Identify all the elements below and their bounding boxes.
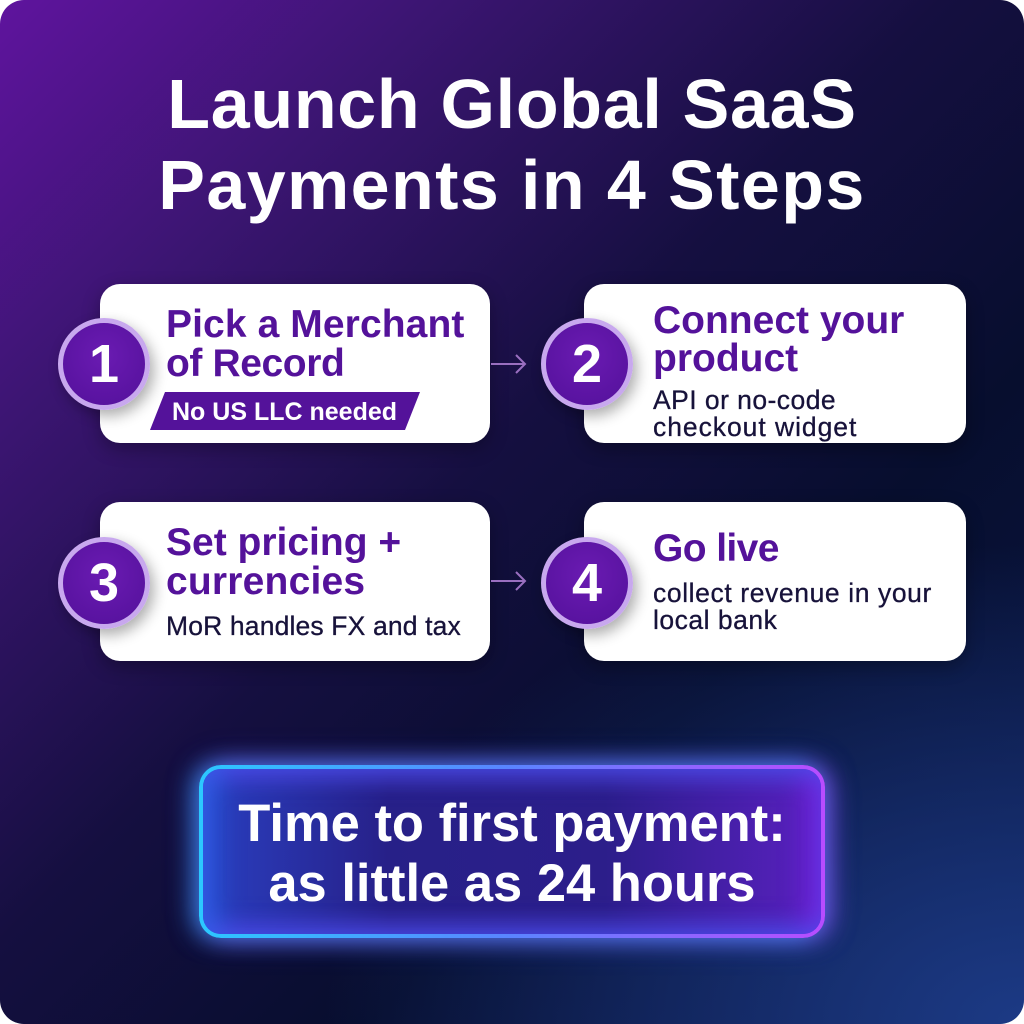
- step 4 text: local bank: [653, 605, 777, 635]
- step 1 heading: [166, 303, 464, 385]
- step 3 number: [58, 537, 150, 629]
- step 4 number: 4: [572, 553, 602, 613]
- step 2 heading: product: [653, 337, 798, 380]
- title: [158, 65, 866, 224]
- callout: [199, 765, 825, 938]
- card 4 background: [584, 502, 966, 661]
- step 3 heading: currencies: [166, 560, 365, 603]
- step 1 number: 1: [89, 334, 119, 394]
- step 2 text: [652, 385, 857, 442]
- step 3 heading: [166, 521, 401, 603]
- step 4 text: collect revenue in your: [653, 578, 932, 608]
- panel: step 3: [58, 502, 492, 670]
- callout text: Time to first payment:: [238, 794, 786, 853]
- step 2 number: 2: [572, 334, 602, 394]
- step 4 heading: Go live: [653, 527, 779, 570]
- title: Payments in 4 Steps: [158, 146, 866, 224]
- arrow 3 to 4: [491, 571, 526, 591]
- step 1 heading: of Record: [166, 342, 344, 385]
- step 2 heading: Connect your: [653, 299, 904, 342]
- panel: step 4: [541, 502, 968, 670]
- step 1 number: [58, 318, 150, 410]
- callout inner glow: [203, 769, 821, 934]
- title: Launch Global SaaS: [167, 65, 857, 143]
- step 1 heading: Pick a Merchant: [166, 303, 464, 346]
- arrow 1 to 2: [491, 354, 526, 374]
- step 3 heading: Set pricing +: [166, 521, 401, 564]
- card 2 background: [584, 284, 966, 443]
- step 3 text: MoR handles FX and tax: [166, 611, 461, 641]
- step 4 number: [541, 537, 633, 629]
- panel: step 2: [541, 284, 966, 450]
- step 2 text: API or no-code: [653, 385, 836, 415]
- step 4 text: [653, 578, 932, 635]
- card 1 background: [100, 284, 490, 443]
- step 1 tag text: No US LLC needed: [172, 398, 397, 426]
- card 3 background: [100, 502, 490, 661]
- step 2 text: checkout widget: [653, 412, 857, 442]
- panel: step 1: [57, 284, 494, 454]
- callout text: [238, 794, 786, 913]
- step 2 number: [541, 318, 633, 410]
- step 1 tag: [150, 392, 420, 430]
- step 3 number: 3: [89, 553, 119, 613]
- step 2 heading: [653, 299, 904, 380]
- callout text: as little as 24 hours: [268, 854, 756, 913]
